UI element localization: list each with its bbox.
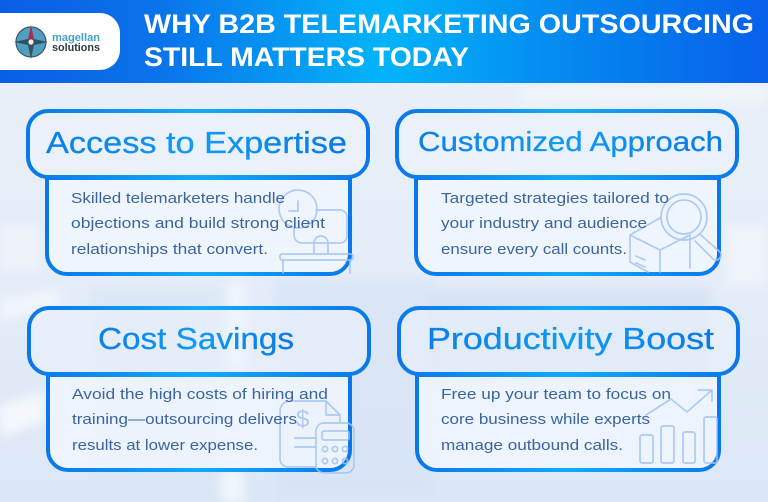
card heading box: Customized Approach xyxy=(418,126,723,157)
card text: results at lower expense. xyxy=(72,438,258,454)
card text: ensure every call counts. xyxy=(441,242,627,258)
card body xyxy=(417,375,719,470)
card heading box xyxy=(397,111,737,177)
title: STILL MATTERS TODAY xyxy=(144,42,469,72)
title xyxy=(144,9,754,72)
icon: compass xyxy=(14,25,48,59)
card text: manage outbound calls. xyxy=(441,438,623,454)
logo: magellan solutions xyxy=(0,13,120,70)
card heading box: Productivity Boost xyxy=(427,321,714,356)
icon: clock and monitor xyxy=(279,190,353,273)
card text: objections and build strong client xyxy=(71,216,325,232)
icon: rising bar chart xyxy=(640,390,717,463)
card body xyxy=(47,178,350,274)
panel: productivity boost xyxy=(399,308,738,470)
card text: Skilled telemarketers handle xyxy=(71,191,285,207)
panel: cost savings xyxy=(29,308,369,473)
logo wordmark: solutions xyxy=(52,42,100,54)
card text: Avoid the high costs of hiring and xyxy=(72,387,328,403)
card text: your industry and audience xyxy=(441,216,647,232)
card text xyxy=(71,191,325,258)
card heading box: Cost Savings xyxy=(98,321,294,356)
card heading box xyxy=(29,308,369,374)
logo wordmark xyxy=(52,32,100,54)
icon: invoice and calculator xyxy=(280,401,354,473)
card text xyxy=(72,387,328,454)
card heading box xyxy=(28,111,368,177)
logo wordmark: magellan xyxy=(52,32,100,44)
card text: core business while experts xyxy=(441,412,650,428)
card body xyxy=(48,375,350,470)
card text: Free up your team to focus on xyxy=(441,387,671,403)
card heading box xyxy=(399,308,738,374)
header banner xyxy=(0,0,768,83)
card text xyxy=(441,387,671,454)
panel: access to expertise xyxy=(28,111,368,274)
card text: Targeted strategies tailored to xyxy=(441,191,669,207)
card body xyxy=(416,178,719,274)
panel: customized approach xyxy=(397,111,737,274)
card text xyxy=(441,191,669,258)
card heading box: Access to Expertise xyxy=(46,125,347,160)
icon: invoice and calculator: $ xyxy=(296,406,309,433)
icon: magnifier and box xyxy=(630,194,721,272)
card text: training—outsourcing delivers xyxy=(72,412,297,428)
card text: relationships that convert. xyxy=(71,242,268,258)
title: WHY B2B TELEMARKETING OUTSOURCING xyxy=(144,9,754,39)
